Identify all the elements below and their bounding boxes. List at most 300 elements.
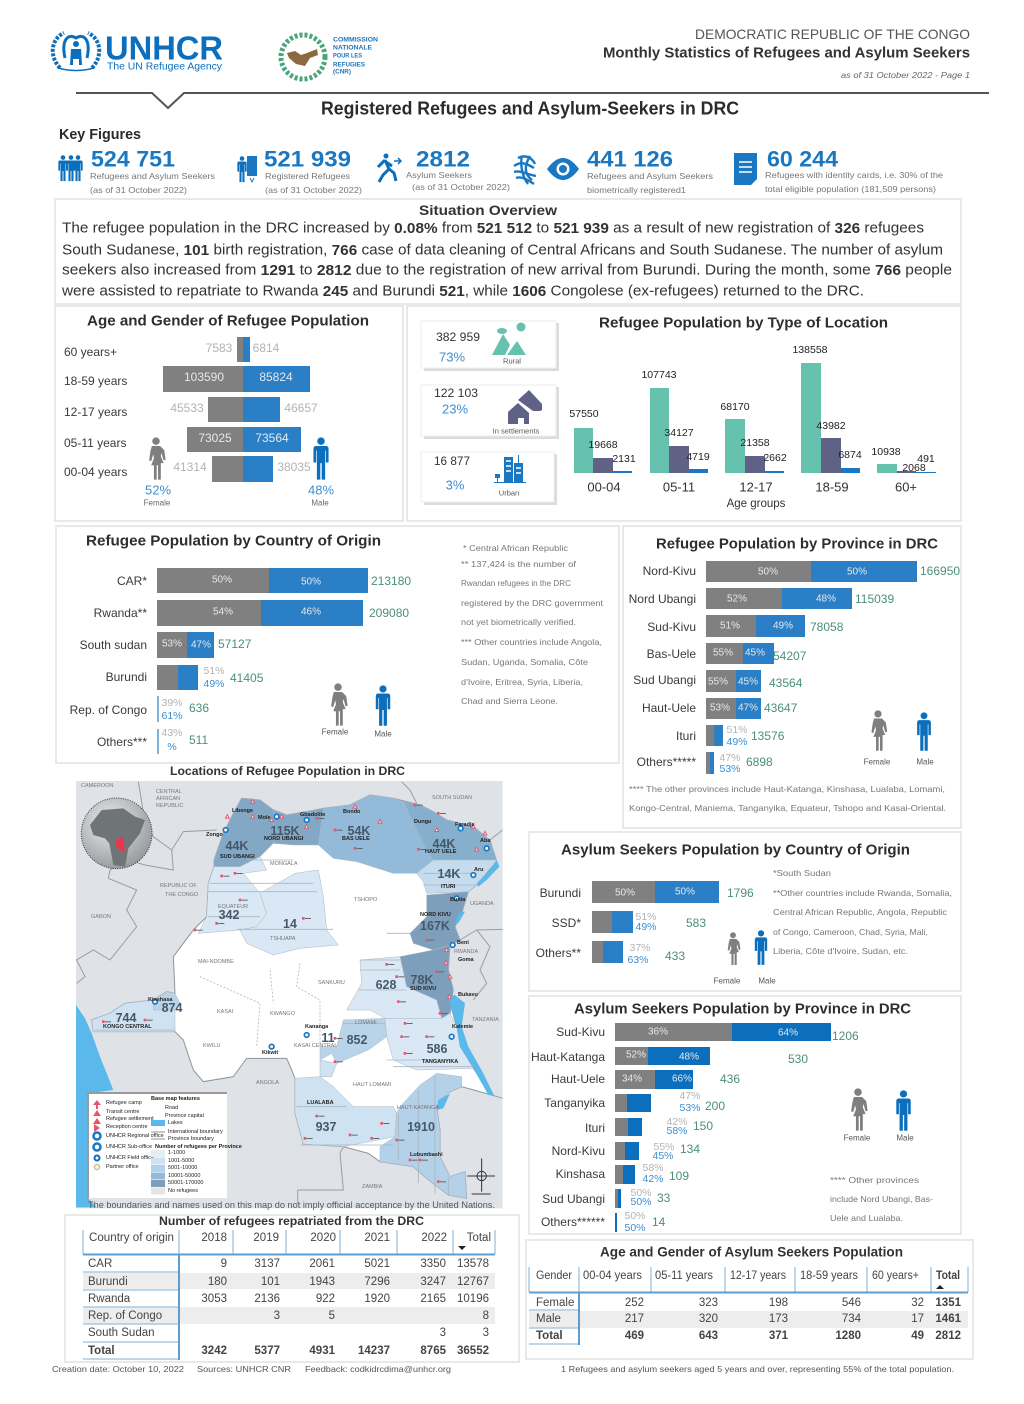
map labels: camps and towns: Mole: [258, 815, 271, 821]
card: rural: Rural: [503, 356, 521, 366]
population pyramid: 45533: [170, 401, 204, 415]
footnotes: Rwandan refugees in the DRC: [461, 578, 571, 588]
map value labels: 586: [427, 1042, 447, 1056]
table: 00-04 years: [583, 1270, 642, 1282]
stacked bar chart: 1796: [727, 886, 754, 900]
key figure: registered refugees: (as of 31 October 2022): [265, 185, 362, 195]
card: urban: 3%: [446, 478, 465, 492]
table: 734: [842, 1313, 862, 1325]
map labels: provinces: TANGANYIKA: [422, 1059, 458, 1065]
stacked bar chart: 66%: [672, 1074, 692, 1084]
table: 8765: [420, 1345, 447, 1357]
population pyramid: 41314: [173, 460, 207, 474]
province labels: Nord-Kivu: [643, 564, 696, 578]
map legend: 5001-10000: [168, 1165, 197, 1171]
stacked bar chart: 49%: [726, 736, 748, 748]
map value labels: 44K: [226, 839, 248, 853]
table: 2136: [254, 1293, 280, 1305]
table: 3053: [201, 1293, 227, 1305]
key figure: identity cards: 60 244: [767, 146, 839, 172]
bar chart: refugees by age and location type: 43982: [816, 420, 846, 432]
stacked bar chart: 209080: [369, 606, 409, 620]
stacked bar chart: Others**: [536, 946, 581, 960]
population pyramid: 7583: [206, 341, 233, 355]
stacked bar chart: 436: [720, 1072, 740, 1086]
bar chart: refugees by age and location type: 12-17: [739, 480, 773, 494]
icon: male: Male: [311, 498, 329, 508]
map labels: provinces: TSHUAPA: [270, 936, 296, 942]
map labels: provinces: SANKURU: [318, 980, 345, 986]
UNHCR logo: The UN Refugee Agency: [107, 62, 222, 72]
table: 1461: [935, 1313, 962, 1325]
CNR logo: REFUGIES: [333, 62, 366, 68]
bar chart: refugees by age and location type: Age groups: [727, 498, 786, 510]
stacked bar chart: 46%: [301, 606, 321, 618]
table: 12-17 years: [730, 1270, 786, 1282]
table: 173: [769, 1313, 788, 1325]
stacked bar chart: 37%: [629, 942, 651, 954]
bar chart: refugees by age and location type: [569, 344, 936, 510]
key figure: asylum seekers: [378, 146, 510, 192]
stacked bar chart: 433: [665, 949, 685, 963]
CNR logo: COMMISSION: [333, 36, 378, 44]
stacked bar chart: 55%: [653, 1141, 675, 1153]
province labels: Tanganyika: [544, 1096, 605, 1110]
key figure: identity cards: total eligible population (181,509 persons): [765, 184, 936, 194]
stacked bar chart: 50%: [630, 1196, 652, 1208]
stacked bar chart: 58%: [642, 1162, 664, 1174]
stacked bar chart: 55%: [708, 676, 728, 688]
country labels: Burundi: [106, 670, 147, 684]
icon: female: 52%: [145, 482, 171, 498]
map legend: [88, 1093, 242, 1198]
footnote: [629, 784, 946, 813]
stacked bar chart: 115039: [855, 592, 894, 606]
province labels: Ituri: [676, 729, 696, 743]
map: locations of refugee population: [76, 781, 503, 1210]
stacked bar chart: 54%: [213, 606, 233, 618]
table: 371: [769, 1330, 789, 1342]
table: Rep. of Congo: [88, 1310, 162, 1322]
heading: situation overview: Situation Overview: [419, 202, 557, 218]
icon: female and male legend: Male: [374, 730, 392, 738]
bar chart: refugees by age and location type: 00-04: [587, 480, 621, 494]
bar chart: refugees by age and location type: 10938: [871, 446, 901, 458]
table: 5021: [364, 1258, 390, 1270]
province labels: Sud-Kivu: [647, 620, 696, 634]
province labels: Sud Ubangi: [542, 1192, 605, 1206]
map labels: provinces: SUD KIVU: [410, 986, 436, 992]
situation text: The refugee population in the DRC increased by 0.08% from 521 512 to 521 939 as a result of new registration of 326 refugees: [62, 220, 924, 236]
map legend: International boundary: [168, 1129, 223, 1135]
stacked bar chart: 47%: [679, 1090, 701, 1102]
bar chart: refugees by age and location type: 2068: [902, 462, 926, 474]
situation text: [61, 220, 952, 300]
footnotes: d'Ivoire, Eritrea, Syria, Liberia,: [461, 677, 583, 687]
map labels: provinces: BAS UELE: [342, 836, 370, 842]
map labels: camps and towns: Faradje: [455, 822, 475, 828]
stacked bar chart: 50%: [301, 576, 321, 588]
icon: female and male legend: Female: [714, 976, 741, 986]
map value labels: 1910: [407, 1120, 435, 1134]
table: [529, 1267, 968, 1345]
map labels: provinces: HAUT UELE: [425, 849, 457, 855]
DRC outline: [92, 795, 497, 1198]
stacked bar chart: 52%: [626, 1050, 646, 1060]
icon: female and male legend: [322, 683, 392, 738]
table: CAR: [88, 1258, 112, 1270]
population pyramid: 38035: [277, 460, 311, 474]
stacked bar chart: 45%: [738, 676, 758, 688]
province labels: Kinshasa: [556, 1167, 605, 1181]
map labels: camps and towns: Gbadolite: [300, 812, 325, 818]
bar chart: refugees by age and location type: 21358: [740, 437, 770, 449]
map value labels: 874: [162, 1001, 182, 1015]
key figure: asylum seekers: 2812: [416, 146, 470, 172]
footnote: [830, 1175, 933, 1223]
footnote: Kongo-Central, Maniema, Tanganyika, Equateur, Tshopo and Kasai-Oriental.: [629, 803, 946, 813]
refugee site markers: [102, 799, 489, 1183]
stacked bar chart: 50%: [675, 886, 695, 898]
table: 2812: [935, 1330, 961, 1342]
stacked bar chart: 50%: [624, 1210, 646, 1222]
table: South Sudan: [88, 1327, 155, 1339]
map legend: Number of refugees per Province: [155, 1144, 242, 1150]
table title: Age and Gender of Asylum Seekers Population: [600, 1244, 903, 1260]
map labels: provinces: MAI-NDOMBE: [198, 959, 234, 965]
stacked bar chart: [157, 568, 411, 754]
map value labels: 744: [116, 1011, 136, 1025]
bar chart: refugees by age and location type: 4719: [686, 451, 710, 463]
map labels: neighbouring countries: CENTRAL: [156, 789, 182, 795]
stacked bar chart: 36%: [648, 1026, 668, 1038]
map disclaimer: The boundaries and names used on this map do not imply official acceptance by the United Nations.: [88, 1200, 495, 1210]
heading: Asylum Seekers Population by Country of Origin: [561, 842, 910, 858]
footer: creation date, sources, feedback: Creation date: October 10, 2022: [52, 1364, 184, 1374]
footnotes: *South Sudan: [773, 868, 831, 878]
key figure: biometric registration: Refugees and Asylum Seekers: [587, 171, 713, 181]
table: Gender: [536, 1270, 572, 1282]
table: 2020: [310, 1232, 336, 1244]
stacked bar chart: 53%: [710, 702, 730, 714]
map legend: Base map features: [151, 1096, 200, 1102]
table: 9: [221, 1258, 227, 1270]
table: 3350: [420, 1258, 446, 1270]
map labels: neighbouring countries: UGANDA: [470, 901, 494, 907]
country labels: Rwanda**: [94, 606, 147, 620]
map labels: camps and towns: Goma: [458, 957, 475, 963]
table: 2165: [420, 1293, 446, 1305]
stacked bar chart: 34%: [622, 1074, 642, 1084]
map labels: provinces: HAUT LOMAMI: [353, 1082, 392, 1088]
map value labels: 14: [283, 917, 297, 931]
stacked bar chart: 530: [788, 1052, 808, 1066]
country labels: South sudan: [80, 638, 147, 652]
stacked bar chart: 49%: [773, 620, 793, 632]
table: 101: [261, 1276, 280, 1288]
country labels: Rep. of Congo: [70, 703, 147, 717]
bar chart: refugees by age and location type: 18-59: [815, 480, 849, 494]
table: Total: [936, 1270, 960, 1282]
footnotes: Central African Republic, Angola, Republic: [773, 907, 948, 917]
map labels: provinces: ITURI: [441, 884, 456, 890]
age labels: [64, 345, 127, 479]
map labels: camps and towns: Bondo: [343, 809, 361, 815]
map legend: Refugee camp: [106, 1100, 142, 1106]
panel: asylum seekers by country of origin: [529, 832, 961, 991]
card: in settlements: In settlements: [493, 426, 540, 436]
key figure: identity cards: [734, 146, 943, 194]
province labels: Haut-Katanga: [531, 1050, 605, 1064]
map labels: camps and towns: Kinshasa: [148, 997, 173, 1003]
stacked bar chart: 47%: [719, 752, 741, 764]
stacked bar chart: 53%: [679, 1102, 701, 1114]
table: 2018: [201, 1232, 227, 1244]
key figure: asylum seekers: Asylum Seekers: [406, 170, 472, 180]
table: 3242: [201, 1345, 227, 1357]
table: 217: [625, 1313, 644, 1325]
map labels: neighbouring countries: REPUBLIC: [156, 803, 184, 809]
card: urban: Urban: [499, 488, 519, 498]
stacked bar chart: 43564: [769, 676, 803, 690]
panel: refugee population by type of location: [407, 306, 961, 521]
main title: Registered Refugees and Asylum-Seekers in DRC: [321, 98, 739, 118]
table: 2019: [253, 1232, 279, 1244]
table: 36552: [457, 1345, 489, 1357]
stacked bar chart: 583: [686, 916, 706, 930]
stacked bar chart: 134: [680, 1142, 700, 1156]
key figure: biometric registration: biometrically registered1: [587, 185, 686, 195]
stacked bar chart: 51%: [635, 911, 657, 923]
stacked bar chart: 63%: [627, 954, 649, 966]
province labels: Others*****: [637, 755, 696, 769]
key figure: registered refugees: Registered Refugees: [265, 171, 350, 181]
table: 49: [911, 1330, 924, 1342]
map labels: camps and towns: Bukavu: [458, 992, 478, 998]
panel: age and gender of refugee population: [55, 306, 403, 521]
stacked bar chart: 48%: [679, 1052, 699, 1062]
stacked bar chart: 52%: [727, 594, 747, 604]
province labels: Sud Ubangi: [633, 673, 696, 687]
stacked bar chart: 49%: [635, 921, 657, 933]
key figure: refugees and asylum seekers: [58, 146, 215, 195]
map labels: provinces: KASAI: [217, 1009, 234, 1015]
CNR logo: (CNR): [333, 68, 351, 76]
map labels: provinces: LOMAMI: [355, 1020, 377, 1026]
stacked bar chart: 57127: [218, 637, 252, 651]
map labels: provinces: NORD KIVU: [420, 912, 451, 918]
map labels: neighbouring countries: RWANDA: [454, 949, 478, 955]
footnotes: *** Other countries include Angola,: [461, 637, 602, 647]
map labels: neighbouring countries: CAMEROON: [81, 783, 113, 789]
map value labels: [116, 824, 460, 1134]
stacked bar chart: [706, 561, 960, 775]
map labels: camps and towns: Aba: [480, 838, 491, 844]
map labels: neighbouring countries: REPUBLIC OF: [160, 883, 197, 889]
stacked bar chart: 47%: [191, 640, 211, 650]
stacked bar chart: 50%: [630, 1187, 652, 1199]
map labels: provinces: TSHOPO: [354, 897, 378, 903]
map legend: Refugee settlement: [106, 1116, 154, 1122]
map labels: neighbouring countries: TANZANIA: [472, 1017, 499, 1023]
population pyramid: 103590: [184, 370, 224, 384]
table: 198: [769, 1297, 788, 1309]
bar chart: refugees by age and location type: 68170: [720, 401, 750, 413]
map labels: neighbouring countries: AFRICAN: [156, 796, 180, 802]
table: 12767: [457, 1276, 489, 1288]
stacked bar chart: 50%: [212, 574, 232, 586]
map legend: UNHCR Sub-office: [106, 1144, 152, 1150]
stacked bar chart: 64%: [778, 1028, 798, 1038]
map labels: neighbouring countries: GABON: [91, 914, 111, 920]
map value labels: 115K: [270, 824, 300, 838]
table: Total: [467, 1232, 491, 1244]
population pyramid: 6814: [253, 341, 280, 355]
header rule with chevron: [76, 93, 989, 108]
map labels: camps and towns: Lubumbashi: [410, 1152, 443, 1158]
CNR logo: POUR LES: [333, 52, 363, 60]
population pyramid: [163, 337, 318, 482]
map legend: Lakes: [168, 1120, 183, 1126]
icon: male: [308, 437, 334, 508]
map value labels: 852: [347, 1033, 367, 1047]
key figures heading: Key Figures: [59, 127, 141, 143]
stacked bar chart: 43647: [764, 701, 798, 715]
country labels: Others***: [97, 735, 147, 749]
table: 13578: [457, 1258, 489, 1270]
stacked bar chart: 48%: [816, 594, 836, 604]
province labels: Bas-Uele: [647, 647, 696, 661]
stacked bar chart: 50%: [847, 566, 867, 578]
age labels: 60 years+: [64, 345, 117, 359]
heading: Refugee Population by Province in DRC: [656, 536, 938, 552]
heading: Age and Gender of Refugee Population: [87, 312, 369, 330]
map labels: provinces: EQUATEUR: [218, 904, 248, 910]
footnote: **** The other provinces include Haut-Katanga, Kinshasa, Lualaba, Lomami,: [629, 784, 945, 794]
map value labels: 11: [321, 1031, 335, 1045]
table: [83, 1230, 495, 1360]
stacked bar chart: 33: [657, 1191, 671, 1205]
table: 252: [625, 1297, 644, 1309]
map value labels: 44K: [433, 837, 455, 851]
province labels: Ituri: [585, 1121, 605, 1135]
key figure: registered refugees: 521 939: [264, 146, 351, 172]
stacked bar chart: Burundi: [540, 886, 581, 900]
map labels: provinces: KWANGO: [270, 1011, 296, 1017]
card: urban: 16 877: [434, 456, 470, 468]
stacked bar chart: %: [167, 741, 177, 753]
footnotes: * Central African Republic: [463, 543, 569, 553]
table: 14237: [358, 1345, 390, 1357]
population pyramid: 46657: [284, 401, 318, 415]
icon: female and male legend: [864, 710, 934, 766]
card: in settlements: 23%: [442, 402, 468, 416]
UNHCR logo: UNHCR: [105, 30, 223, 66]
map labels: provinces: [103, 836, 458, 1111]
document header: DEMOCRATIC REPUBLIC OF THE CONGO: [695, 26, 970, 42]
table: 469: [625, 1330, 644, 1342]
table: 5377: [254, 1345, 280, 1357]
heading: Refugee Population by Country of Origin: [86, 532, 381, 550]
table: 1351: [935, 1297, 962, 1309]
map labels: camps and towns: Kikwit: [262, 1050, 278, 1056]
map labels: neighbouring countries: [81, 783, 499, 1190]
heading: Asylum Seekers Population by Province in DRC: [574, 1000, 911, 1018]
key figure: asylum seekers: (as of 31 October 2022): [412, 182, 510, 192]
stacked bar chart: 39%: [161, 697, 183, 709]
stacked bar chart: 50%: [758, 566, 778, 578]
table: 60 years+: [872, 1270, 919, 1282]
age labels: 18-59 years: [64, 374, 127, 388]
province labels: Haut-Uele: [551, 1072, 605, 1086]
lakes: [437, 860, 499, 1110]
table: Burundi: [88, 1276, 128, 1288]
map labels: camps and towns: Kananga: [305, 1024, 329, 1030]
document header: [603, 26, 970, 80]
key figure: refugees and asylum seekers: 524 751: [91, 146, 175, 172]
footnotes: [461, 543, 604, 706]
age labels: 12-17 years: [64, 405, 127, 419]
stacked bar chart: 41405: [230, 671, 264, 685]
map legend: No refugees: [168, 1188, 198, 1194]
province labels: Others******: [541, 1215, 605, 1229]
map labels: provinces: SUD UBANGI: [220, 854, 255, 860]
panel: table of refugees repatriated: [65, 1215, 519, 1362]
table: 7296: [364, 1276, 390, 1288]
footer: creation date, sources, feedback: [52, 1364, 451, 1374]
footnotes: of Congo, Cameroon, Chad, Syria, Mali,: [773, 927, 928, 937]
bar chart: refugees by age and location type: 2662: [763, 452, 787, 464]
inset globe: [81, 798, 152, 869]
ocean: [76, 1005, 113, 1207]
stacked bar chart: SSD*: [552, 916, 581, 930]
situation text: South Sudanese, 101 birth registration, 766 case of data cleaning of Central Africans and South Sudanese. The number of asylum: [62, 242, 943, 258]
footnote: biometric age note: 1 Refugees and asylum seekers aged 5 years and over, representing 55% of the total population.: [561, 1364, 954, 1374]
table title: Number of refugees repatriated from the DRC: [159, 1216, 424, 1228]
CNR logo: NATIONALE: [333, 44, 373, 52]
key figure: biometric registration: [514, 146, 713, 195]
map labels: neighbouring countries: SOUTH SUDAN: [432, 795, 472, 801]
footnote: **** Other provinces: [830, 1175, 919, 1185]
table: 3: [274, 1310, 280, 1322]
table: 32: [911, 1297, 924, 1309]
map value labels: 14K: [438, 867, 460, 881]
map labels: camps and towns: Libenge: [232, 808, 253, 814]
icon: female: [144, 437, 171, 508]
table: 922: [316, 1293, 335, 1305]
table: Total: [88, 1345, 115, 1357]
bar chart: refugees by age and location type: 107743: [641, 369, 677, 381]
map labels: camps and towns: Aru: [474, 867, 483, 873]
map labels: camps and towns: Bunia: [450, 897, 466, 903]
stacked bar chart: 54207: [773, 649, 807, 663]
table: 3: [483, 1327, 489, 1339]
stacked bar chart: 51%: [720, 620, 740, 632]
bar chart: refugees by age and location type: 57550: [569, 408, 599, 420]
map labels: provinces: KWILU: [203, 1043, 220, 1049]
stacked bar chart: 47%: [738, 702, 758, 714]
stacked bar chart: 43%: [161, 727, 183, 739]
table: 1280: [835, 1330, 861, 1342]
table: Rwanda: [88, 1293, 131, 1305]
table: 323: [699, 1297, 718, 1309]
province labels: Haut-Uele: [642, 701, 696, 715]
table: 10196: [457, 1293, 489, 1305]
map labels: neighbouring countries: THE CONGO: [165, 892, 199, 898]
map legend: Province capital: [165, 1113, 204, 1119]
map legend: UNHCR Field office: [106, 1155, 154, 1161]
panel: refugee population by country of origin: [56, 526, 619, 763]
